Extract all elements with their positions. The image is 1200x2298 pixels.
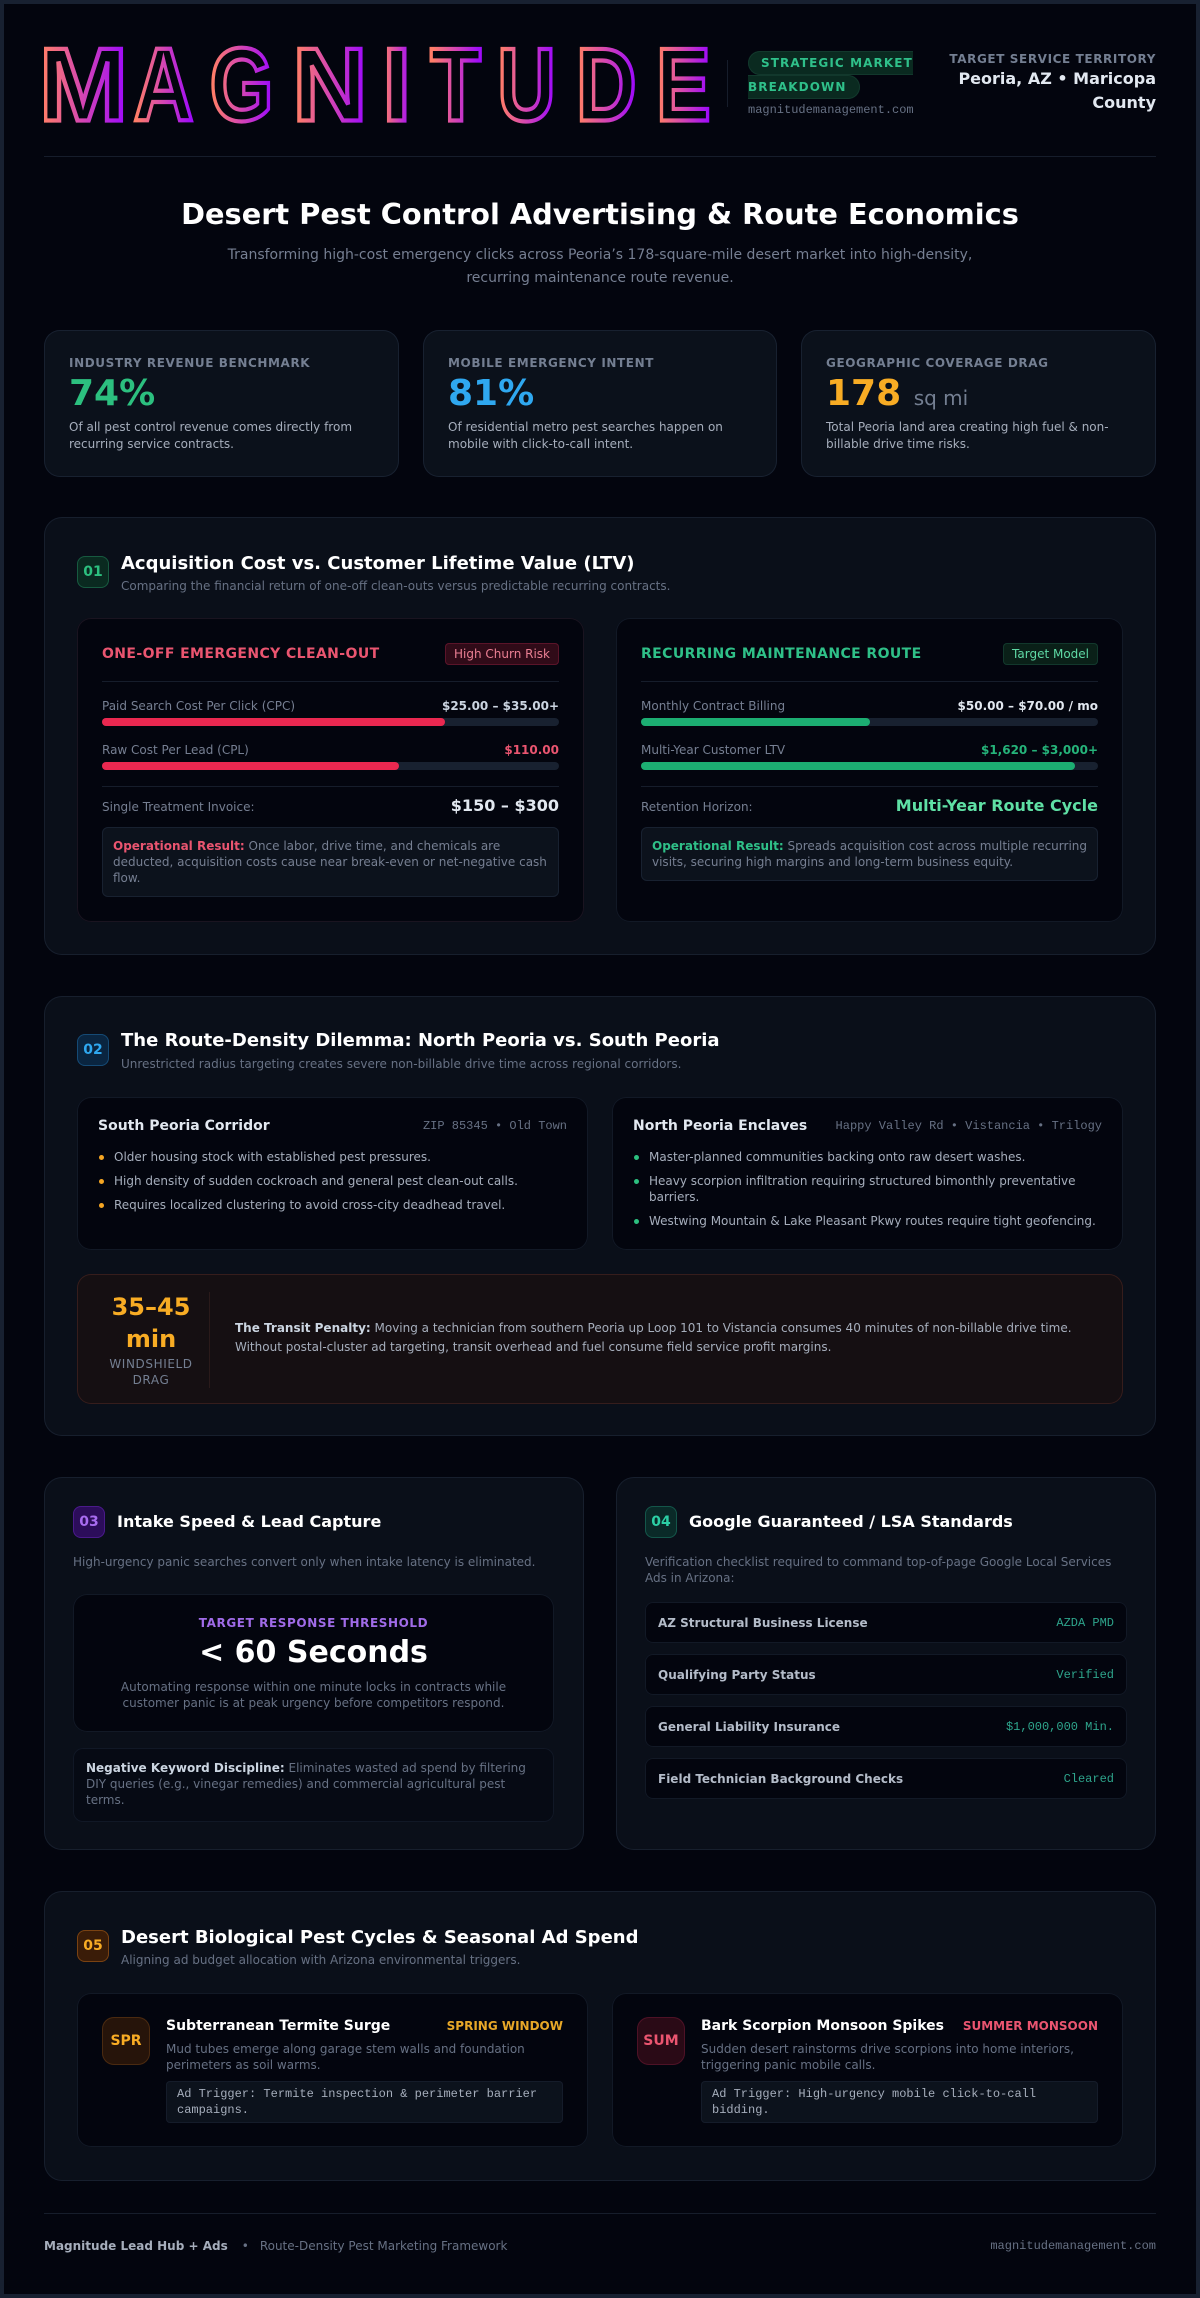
icon: SPR: SPR: [110, 2033, 142, 2049]
stat: windshield drag: WINDSHIELD: [109, 1357, 193, 1371]
callout: operational result: flow.: [113, 871, 140, 885]
stat card: industry revenue benchmark: recurring service contracts.: [69, 437, 234, 451]
stat card: mobile emergency intent: [423, 330, 777, 477]
section subheading: Comparing the financial return of one-off clean-outs versus predictable recurring contracts.: [121, 579, 670, 593]
stat card: mobile emergency intent: mobile with click-to-call intent.: [448, 437, 633, 451]
title block: [181, 197, 1019, 286]
bullet list: Requires localized clustering to avoid cross-city deadhead travel.: [114, 1198, 505, 1212]
ad trigger: [166, 2081, 563, 2123]
panel: summer scorpion spikes: Sudden desert rainstorms drive scorpions into home interiors,: [701, 2042, 1074, 2056]
section description: Ads in Arizona:: [645, 1571, 735, 1585]
metric: retention horizon: Retention Horizon:: [641, 800, 753, 814]
panel: summer scorpion spikes: triggering panic mobile calls.: [701, 2058, 875, 2072]
panel: spring termite surge: Mud tubes emerge along garage stem walls and foundation: [166, 2042, 525, 2056]
section subheading: Unrestricted radius targeting creates severe non-billable drive time across regional corridors.: [121, 1057, 681, 1071]
panel: target response threshold: [73, 1594, 554, 1732]
transit penalty text: Without postal-cluster ad targeting, transit overhead and fuel consume field service profit margins.: [235, 1340, 831, 1354]
subtitle: Transforming high-cost emergency clicks across Peoria’s 178-square-mile desert market into high-density,: [228, 247, 972, 263]
panel: south peoria corridor: [77, 1097, 588, 1250]
checklist row: insurance: $1,000,000 Min.: [1006, 1720, 1114, 1734]
callout: negative keyword discipline: [73, 1748, 554, 1822]
badge: strategic market breakdown: [748, 51, 913, 99]
panel: target response threshold: customer panic is at peak urgency before competitors respond.: [123, 1696, 504, 1710]
checklist row: qualifying party: [645, 1654, 1127, 1695]
stat card: industry revenue benchmark: Of all pest control revenue comes directly from: [69, 420, 352, 434]
target service territory: [949, 52, 1156, 112]
transit penalty text: The Transit Penalty: Moving a technician from southern Peoria up Loop 101 to Vistancia consumes 40 minutes of non-billable drive time.: [235, 1321, 1072, 1335]
panel: one-off emergency clean-out: $150 – $300: [451, 796, 559, 815]
stat card: geographic coverage drag: billable drive time risks.: [826, 437, 970, 451]
section number 04: 04: [651, 1514, 671, 1530]
panel: one-off emergency clean-out: $25.00 – $35.00+: [442, 699, 559, 713]
transit penalty text: [235, 1321, 1072, 1354]
stat card: geographic coverage drag: Total Peoria land area creating high fuel & non-: [826, 420, 1109, 434]
checklist row: insurance: General Liability Insurance: [658, 1720, 840, 1734]
section number 04: [645, 1506, 677, 1538]
panel: section 04 google guaranteed: [616, 1477, 1156, 1850]
checklist row: background checks: Cleared: [1064, 1772, 1114, 1786]
callout: negative keyword discipline: DIY queries (e.g., vinegar remedies) and commercial agricultural pest: [86, 1777, 505, 1791]
panel: section 01 acquisition cost vs LTV: [44, 517, 1156, 955]
footer website: magnitudemanagement.com: [990, 2239, 1156, 2253]
panel: south peoria corridor: South Peoria Corridor: [98, 1118, 270, 1134]
bullet list: High density of sudden cockroach and general pest clean-out calls.: [114, 1174, 518, 1188]
stat: windshield drag: 35–45: [112, 1293, 190, 1321]
panel: spring termite surge: perimeters as soil warms.: [166, 2058, 321, 2072]
callout: negative keyword discipline: Negative Keyword Discipline: Eliminates wasted ad spend by filtering: [86, 1761, 526, 1775]
target service territory: Peoria, AZ • Maricopa: [958, 69, 1156, 88]
panel: recurring maintenance route: $1,620 – $3,000+: [981, 743, 1098, 757]
stat card: industry revenue benchmark: INDUSTRY REVENUE BENCHMARK: [69, 356, 310, 370]
section number 05: [77, 1930, 109, 1962]
ad trigger: [701, 2081, 1098, 2123]
section heading: Acquisition Cost vs. Customer Lifetime Value (LTV): [121, 553, 634, 574]
panel: spring termite surge: [77, 1993, 588, 2147]
checklist row: insurance: [645, 1706, 1127, 1747]
checklist row: background checks: Field Technician Background Checks: [658, 1772, 903, 1786]
metric: single treatment invoice: Single Treatment Invoice:: [102, 800, 255, 814]
ad trigger: Ad Trigger: Termite inspection & perimeter barrier: [177, 2087, 537, 2101]
callout: operational result: Operational Result: Spreads acquisition cost across multiple recurring: [652, 839, 1087, 853]
metric: monthly contract billing: Monthly Contract Billing: [641, 699, 785, 713]
badge: strategic market breakdown: STRATEGIC MARKET: [761, 56, 913, 70]
panel: one-off emergency clean-out: $110.00: [504, 743, 559, 757]
ad trigger: Ad Trigger: High-urgency mobile click-to-call: [712, 2087, 1036, 2101]
panel: recurring maintenance route: $50.00 – $70.00 / mo: [958, 699, 1098, 713]
website link: magnitudemanagement.com: [748, 103, 914, 117]
checklist row: qualifying party: Verified: [1056, 1668, 1114, 1682]
stat card: industry revenue benchmark: 74%: [69, 373, 155, 414]
bar: billing 50%: [641, 718, 1098, 726]
bar: LTV 95%: [641, 762, 1098, 770]
panel: recurring maintenance route: [616, 618, 1123, 922]
target service territory: TARGET SERVICE TERRITORY: [949, 52, 1156, 66]
ad trigger: bidding.: [712, 2103, 770, 2117]
icon: SUM: SUM: [643, 2033, 679, 2049]
main title: Desert Pest Control Advertising & Route Economics: [181, 197, 1019, 231]
panel: target response threshold: TARGET RESPONSE THRESHOLD: [199, 1616, 428, 1630]
section number 03: 03: [79, 1514, 99, 1530]
icon: SUM: [637, 2017, 685, 2065]
subtitle: recurring maintenance route revenue.: [466, 270, 734, 286]
section description: Verification checklist required to command top-of-page Google Local Services: [645, 1555, 1111, 1569]
header: [44, 40, 1156, 157]
section number 02: 02: [83, 1042, 103, 1058]
section heading: Google Guaranteed / LSA Standards: [689, 1512, 1013, 1531]
section heading: The Route-Density Dilemma: North Peoria vs. South Peoria: [121, 1030, 720, 1051]
section number 01: 01: [83, 564, 103, 580]
stat: windshield drag: DRAG: [133, 1373, 169, 1387]
callout: operational result: [641, 827, 1098, 881]
bar: CPL 65%: [102, 762, 559, 770]
panel: north peoria enclaves: Happy Valley Rd • Vistancia • Trilogy: [836, 1119, 1102, 1133]
section description: High-urgency panic searches convert only when intake latency is eliminated.: [73, 1555, 535, 1569]
section number 05: 05: [83, 1938, 103, 1954]
section number 01: [77, 556, 109, 588]
panel: one-off emergency clean-out: [77, 618, 584, 922]
panel: recurring maintenance route: Multi-Year Route Cycle: [896, 796, 1098, 815]
bullet list: Heavy scorpion infiltration requiring structured bimonthly preventative: [649, 1174, 1076, 1188]
bullet list: Master-planned communities backing onto raw desert washes.: [649, 1150, 1025, 1164]
callout: transit penalty: [77, 1274, 1123, 1404]
bullet list: [634, 1150, 1096, 1228]
section number 03: [73, 1506, 105, 1538]
panel: recurring maintenance route: RECURRING MAINTENANCE ROUTE: [641, 646, 922, 662]
panel: section 02 route-density dilemma: [44, 996, 1156, 1436]
metric: raw CPL: Raw Cost Per Lead (CPL): [102, 743, 249, 757]
panel: north peoria enclaves: [612, 1097, 1123, 1250]
tag: spring window: SPRING WINDOW: [447, 2019, 563, 2033]
target service territory: County: [1092, 93, 1156, 112]
checklist row: license: [645, 1602, 1127, 1643]
stat card: geographic coverage drag: [801, 330, 1156, 477]
section subheading: Aligning ad budget allocation with Arizona environmental triggers.: [121, 1953, 520, 1967]
panel: one-off emergency clean-out: ONE-OFF EMERGENCY CLEAN-OUT: [102, 646, 380, 662]
panel: summer scorpion spikes: [612, 1993, 1123, 2147]
logo: MAGNITUDE wordmark: [44, 40, 711, 130]
checklist row: qualifying party: Qualifying Party Status: [658, 1668, 816, 1682]
bar: CPC 75%: [102, 718, 559, 726]
tag: summer monsoon: SUMMER MONSOON: [963, 2019, 1098, 2033]
tag: high churn risk: High Churn Risk: [454, 647, 550, 661]
bullet list: [99, 1150, 518, 1212]
checklist row: background checks: [645, 1758, 1127, 1799]
callout: operational result: [102, 827, 559, 897]
checklist row: license: AZDA PMD: [1056, 1616, 1114, 1630]
tag: target model: Target Model: [1012, 647, 1089, 661]
metric: multi-year customer LTV: Multi-Year Customer LTV: [641, 743, 785, 757]
section heading: Desert Biological Pest Cycles & Seasonal Ad Spend: [121, 1927, 638, 1948]
panel: north peoria enclaves: North Peoria Enclaves: [633, 1118, 807, 1134]
callout: operational result: visits, securing high margins and long-term business equity.: [652, 855, 1013, 869]
stat card: mobile emergency intent: MOBILE EMERGENCY INTENT: [448, 356, 654, 370]
footer credit: Magnitude Lead Hub + Ads • Route-Density Pest Marketing Framework: [44, 2239, 507, 2253]
tag: high churn risk: [445, 643, 559, 665]
tag: target model: [1003, 643, 1098, 665]
panel: target response threshold: < 60 Seconds: [199, 1635, 428, 1670]
icon: SPR: [102, 2017, 150, 2065]
badge: strategic market breakdown: BREAKDOWN: [748, 80, 847, 94]
section heading: Intake Speed & Lead Capture: [117, 1512, 381, 1531]
checklist row: license: AZ Structural Business License: [658, 1616, 868, 1630]
panel: summer scorpion spikes: Bark Scorpion Monsoon Spikes: [701, 2018, 944, 2034]
footer: [44, 2213, 1156, 2253]
bullet list: Older housing stock with established pest pressures.: [114, 1150, 431, 1164]
callout: operational result: Operational Result: Once labor, drive time, and chemicals are: [113, 839, 500, 853]
panel: south peoria corridor: ZIP 85345 • Old Town: [423, 1119, 567, 1133]
metric: paid search CPC: Paid Search Cost Per Click (CPC): [102, 699, 295, 713]
section description: [645, 1555, 1111, 1585]
stat card: mobile emergency intent: Of residential metro pest searches happen on: [448, 420, 723, 434]
stat card: geographic coverage drag: GEOGRAPHIC COVERAGE DRAG: [826, 356, 1049, 370]
panel: spring termite surge: Subterranean Termite Surge: [166, 2018, 390, 2034]
panel: section 03 intake speed: [44, 1477, 584, 1850]
stat: windshield drag: [109, 1293, 193, 1387]
bullet list: barriers.: [649, 1190, 699, 1204]
section number 02: [77, 1034, 109, 1066]
subtitle: [228, 247, 972, 286]
callout: operational result: deducted, acquisition costs cause near break-even or net-negative cash: [113, 855, 547, 869]
panel: section 05 seasonal pest cycles: [44, 1891, 1156, 2181]
ad trigger: campaigns.: [177, 2103, 249, 2117]
panel: target response threshold: Automating response within one minute locks in contracts while: [121, 1680, 506, 1694]
callout: negative keyword discipline: terms.: [86, 1793, 125, 1807]
stat: windshield drag: min: [126, 1325, 176, 1353]
stat card: geographic coverage drag: 178 sq mi: [826, 373, 968, 414]
bullet list: Westwing Mountain & Lake Pleasant Pkwy routes require tight geofencing.: [649, 1214, 1096, 1228]
stat card: mobile emergency intent: 81%: [448, 373, 534, 414]
stat card: industry revenue benchmark: [44, 330, 399, 477]
